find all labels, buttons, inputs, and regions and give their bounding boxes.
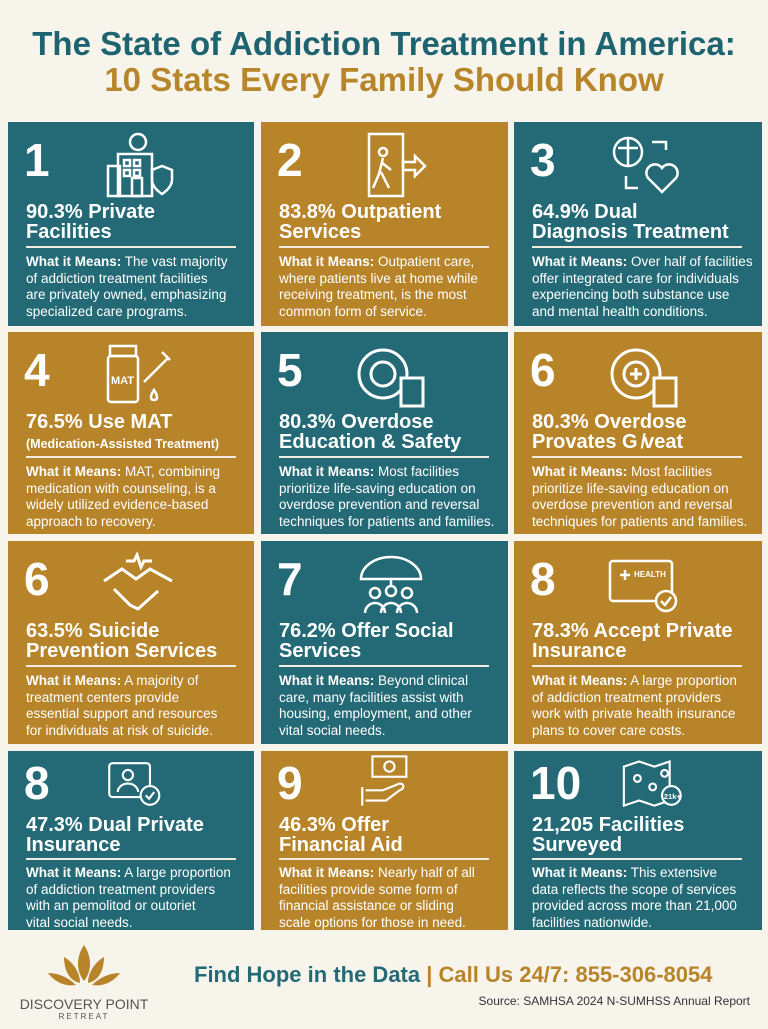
title: The State of Addiction Treatment in America: <box>32 25 736 62</box>
panel: 10 facilities surveyed: data reflects the scope of services <box>532 882 736 896</box>
panel: 3 dual diagnosis <box>514 122 762 326</box>
panel: 2 outpatient: where patients live at home while <box>279 270 478 286</box>
panel: 4 MAT: What it Means: MAT, combining <box>26 464 220 479</box>
panel: 6 overdose (dup): overdose prevention and reversal <box>532 497 732 512</box>
panel: 1 private facilities: are privately owned, emphasizing <box>26 287 226 302</box>
panel: 4 MAT: medication with counseling, is a <box>26 480 216 496</box>
panel: 7 social services: vital social needs. <box>279 722 386 738</box>
panel: 6 overdose (dup): What it Means: Most facilities <box>532 464 712 479</box>
icon: MAT bottle syringe <box>106 344 171 404</box>
panel: 1 private facilities: Facilities <box>26 221 112 243</box>
panel: 4 MAT: widely utilized evidence-based <box>26 497 208 512</box>
panel: 8 private insurance <box>514 541 762 744</box>
panel: 3 dual diagnosis: and mental health conditions. <box>532 304 708 318</box>
panel: 1 private facilities: specialized care programs. <box>26 304 187 318</box>
panel: 8 private insurance: Insurance <box>532 640 626 662</box>
panel: 6 overdose (dup): 6 <box>530 344 556 396</box>
panel: 5 overdose education <box>261 332 508 534</box>
icon: money hand <box>361 755 408 806</box>
panel: 8 dual private insurance <box>8 751 254 930</box>
icon: map pins: 21k+ <box>664 792 681 801</box>
panel: 8 private insurance: What it Means: A large proportion <box>532 673 737 688</box>
panel: 6 overdose (dup) <box>514 332 762 534</box>
icon: umbrella people <box>360 556 422 613</box>
panel: 6 suicide prevention: for individuals at risk of suicide. <box>26 722 213 738</box>
panel: 2 outpatient: Services <box>279 221 361 243</box>
panel: 8 private insurance: 78.3% Accept Private <box>532 620 732 642</box>
panel: 10 facilities surveyed: Surveyed <box>532 834 622 856</box>
panel: 1 private facilities <box>8 122 254 326</box>
panel: 6 suicide prevention: 63.5% Suicide <box>26 620 159 642</box>
panel: 5 overdose education: techniques for patients and families. <box>279 514 494 528</box>
title: 10 Stats Every Family Should Know <box>104 61 664 98</box>
panel: 6 overdose (dup): techniques for patients and families. <box>532 514 747 528</box>
panel: 2 outpatient <box>261 122 508 326</box>
icon: insurance card <box>608 560 678 612</box>
panel: 8 private insurance: plans to cover care costs. <box>532 722 685 738</box>
panel: 9 financial aid: Financial Aid <box>279 834 403 856</box>
panel: 2 outpatient: common form of service. <box>279 304 427 318</box>
panel: 8 dual private insurance: vital social needs. <box>26 914 133 930</box>
panel: 4 MAT <box>8 332 254 534</box>
panel: 1 private facilities: of addiction treatment facilities <box>26 270 208 286</box>
panel: 9 financial aid: 9 <box>277 757 303 809</box>
panel: 7 social services <box>261 541 508 744</box>
panel: 10 facilities surveyed <box>514 751 762 930</box>
panel: 8 private insurance: 8 <box>530 553 556 605</box>
panel: 1 private facilities: What it Means: The vast majority <box>26 254 228 269</box>
panel: 6 suicide prevention: essential support and resources <box>26 706 217 721</box>
panel: 3 dual diagnosis: offer integrated care for individuals <box>532 270 739 286</box>
panel: 5 overdose education: What it Means: Most facilities <box>279 464 459 479</box>
panel: 5 overdose education: Education & Safety <box>279 431 461 453</box>
icon: person check <box>108 762 160 806</box>
panel: 3 dual diagnosis: What it Means: Over half of facilities <box>532 254 753 269</box>
panel: 9 financial aid <box>261 751 508 930</box>
panel: 2 outpatient: receiving treatment, is the most <box>279 287 467 302</box>
panel: 6 overdose (dup): 80.3% Overdose <box>532 411 687 433</box>
panel: 7 social services: 76.2% Offer Social <box>279 620 454 642</box>
panel: 7 social services: care, many facilities assist with <box>279 690 464 704</box>
logo <box>20 945 148 1021</box>
panel: 6 suicide prevention: treatment centers provide <box>26 690 179 704</box>
panel: 8 dual private insurance: with an pemolitod or outoriet <box>26 898 196 913</box>
panel: 8 dual private insurance: 8 <box>24 757 50 809</box>
panel: 2 outpatient: 83.8% Outpatient <box>279 201 441 223</box>
panel: 8 private insurance: of addiction treatment providers <box>532 690 721 704</box>
panel: 5 overdose education: prioritize life-saving education on <box>279 480 476 496</box>
panel: 2 outpatient: 2 <box>277 134 303 186</box>
panel: 10 facilities surveyed: 21,205 Facilities <box>532 814 684 836</box>
panel: 2 outpatient: What it Means: Outpatient care, <box>279 254 474 269</box>
icon: MAT bottle syringe: MAT <box>111 375 134 387</box>
panel: 5 overdose education: 5 <box>277 344 303 396</box>
panel: 9 financial aid: What it Means: Nearly half of all <box>279 865 475 880</box>
panel: 10 facilities surveyed: provided across more than 21,000 <box>532 898 737 913</box>
panel: 5 overdose education: 80.3% Overdose <box>279 411 434 433</box>
panel: 1 private facilities: 90.3% Private <box>26 201 155 223</box>
title <box>32 25 736 98</box>
panel: 10 facilities surveyed: 10 <box>530 757 581 809</box>
panel: 3 dual diagnosis: experiencing both substance use <box>532 287 729 302</box>
panel: 6 suicide prevention: Prevention Services <box>26 640 217 662</box>
panel: 4 MAT: approach to recovery. <box>26 514 156 528</box>
panel: 10 facilities surveyed: What it Means: This extensive <box>532 865 717 880</box>
panel: 8 private insurance: work with private health insurance <box>532 706 735 721</box>
panel: 3 dual diagnosis: 64.9% Dual <box>532 201 638 223</box>
panel: 6 overdose (dup): Provates G ̸veat <box>532 431 683 453</box>
panel: 3 dual diagnosis: 3 <box>530 134 556 186</box>
panel: 9 financial aid: financial assistance or sliding <box>279 898 454 913</box>
icon: door exit <box>368 132 427 198</box>
panel: 8 dual private insurance: What it Means: A large proportion <box>26 865 231 880</box>
panel: 9 financial aid: scale options for those in need. <box>279 914 466 930</box>
icon: hospital <box>106 132 174 198</box>
panel: 6 overdose (dup): prioritize life-saving education on <box>532 480 729 496</box>
panel: 7 social services: Services <box>279 640 361 662</box>
panel: 1 private facilities: 1 <box>24 134 50 186</box>
panel: 4 MAT: (Medication-Assisted Treatment) <box>26 437 219 451</box>
tagline: Find Hope in the Data | Call Us 24/7: 855-306-8054 <box>194 962 712 987</box>
panel: 3 dual diagnosis: Diagnosis Treatment <box>532 221 729 243</box>
icon: map pins <box>622 760 682 808</box>
panel: 8 dual private insurance: 47.3% Dual Private <box>26 814 204 836</box>
panel: 6 suicide prevention: What it Means: A majority of <box>26 673 199 688</box>
panel: 4 MAT: 76.5% Use MAT <box>26 411 172 433</box>
panel: 4 MAT: 4 <box>24 344 50 396</box>
panel: 7 social services: 7 <box>277 553 303 605</box>
logo: DISCOVERY POINT <box>20 996 148 1012</box>
icon: handshake <box>103 551 173 611</box>
panel: 9 financial aid: facilities provide some form of <box>279 882 458 896</box>
icon: life ring <box>358 348 424 408</box>
panel: 8 dual private insurance: of addiction treatment providers <box>26 882 215 896</box>
logo: RETREAT <box>59 1012 109 1021</box>
panel: 10 facilities surveyed: facilities nationwide. <box>532 914 652 930</box>
panel: 6 suicide prevention <box>8 541 254 744</box>
panel: 5 overdose education: overdose prevention and reversal <box>279 497 479 512</box>
panel: 8 dual private insurance: Insurance <box>26 834 120 856</box>
panel: 7 social services: housing, employment, and other <box>279 706 472 721</box>
icon: life ring cross <box>610 348 678 408</box>
icon: insurance card: HEALTH <box>634 570 666 579</box>
panel: 7 social services: What it Means: Beyond clinical <box>279 673 468 688</box>
panel: 6 suicide prevention: 6 <box>24 553 50 605</box>
icon: brain heart <box>612 136 679 194</box>
panel: 9 financial aid: 46.3% Offer <box>279 814 389 836</box>
source: Source: SAMHSA 2024 N-SUMHSS Annual Report <box>479 994 750 1008</box>
